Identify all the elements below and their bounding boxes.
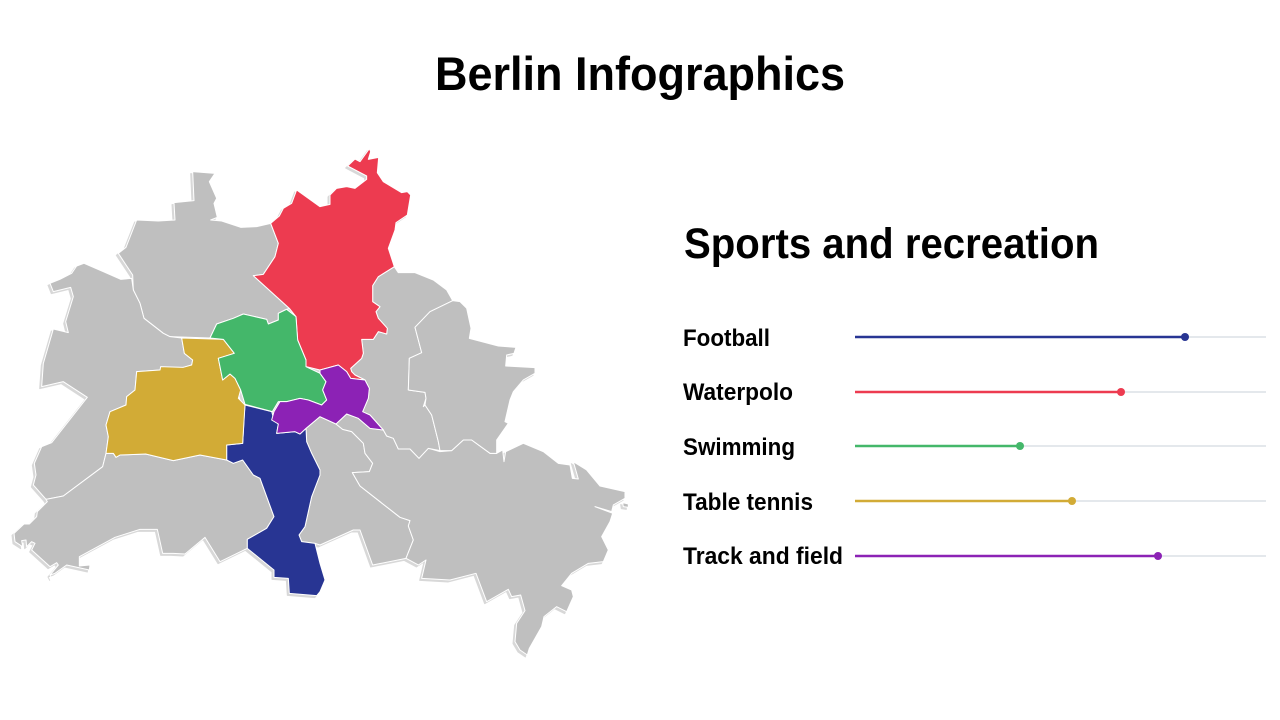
district: islet east [623, 503, 628, 507]
row: table tennis [683, 489, 1266, 516]
district: west grey [33, 263, 193, 499]
row: waterpolo: Waterpolo [683, 379, 793, 406]
row: football: Football [683, 325, 770, 352]
district: north-east grey [351, 267, 453, 458]
district: green [210, 309, 327, 412]
district: purple [272, 365, 383, 434]
district: red [253, 149, 411, 380]
row: track and field [683, 543, 1266, 570]
row: table tennis: Table tennis [683, 489, 813, 516]
row: waterpolo [683, 379, 1266, 406]
district: south-east grey [336, 414, 625, 655]
row: swimming [683, 434, 1266, 461]
district: south-central grey [299, 417, 413, 565]
title: Berlin Infographics [435, 47, 845, 100]
heading: sports and recreation: Sports and recreation [684, 220, 1099, 268]
district: east grey [408, 301, 535, 453]
district: north-west grey [118, 172, 289, 338]
row: track and field: Track and field [683, 543, 843, 570]
row: swimming: Swimming [683, 434, 795, 461]
map of Berlin districts [14, 149, 628, 655]
district: blue [227, 405, 325, 596]
row: football [683, 325, 1266, 352]
district: gold [106, 338, 245, 461]
district: south-west grey [14, 453, 274, 578]
